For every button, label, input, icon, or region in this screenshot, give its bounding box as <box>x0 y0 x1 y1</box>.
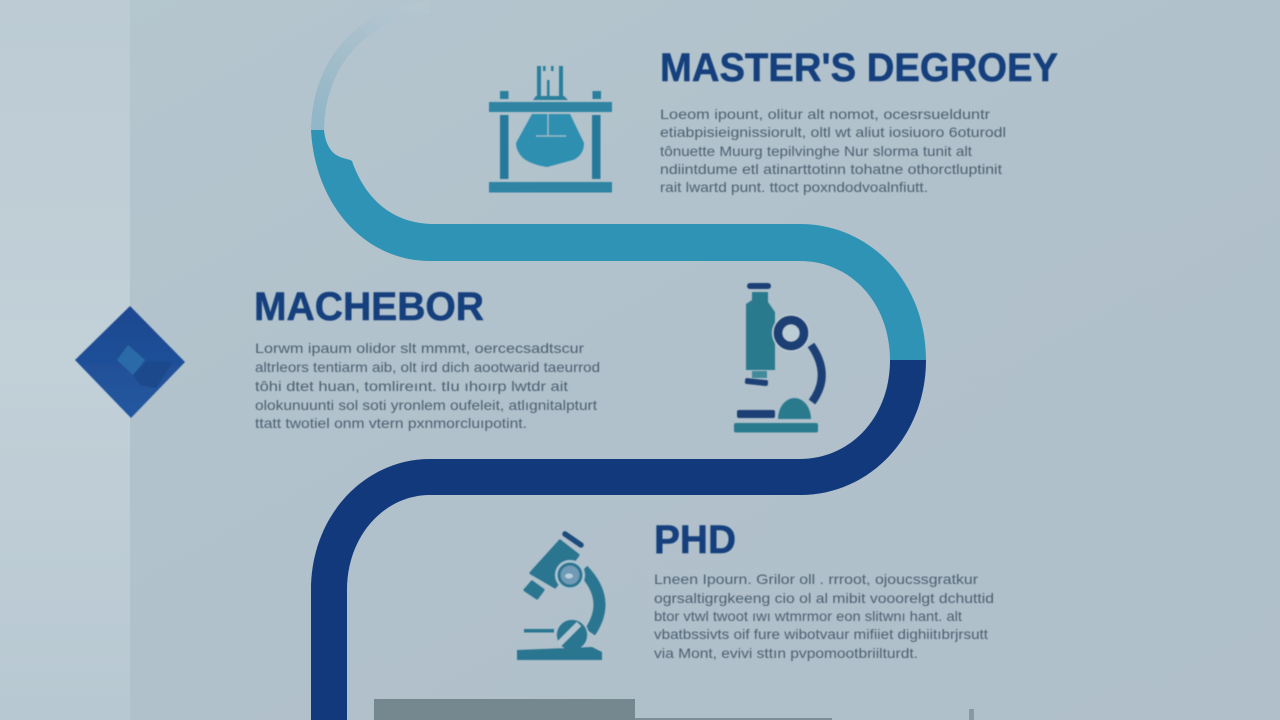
text block: phd: ogrsaltigrgkeeng cio ol al mibit vooorelgt dchuttid <box>654 590 994 606</box>
text block: bachelor: olokunuunti sol soti yronlem oufeleit, atlıgnitalpturt <box>255 397 597 413</box>
text block: master's: tônuette Muurg tepilvinghe Nur slorma tunit alt <box>660 143 972 159</box>
text block: phd: via Mont, evivi sttın pvpomootbriilturdt. <box>654 645 918 661</box>
text block: master's <box>660 106 1006 195</box>
left strip <box>0 0 130 720</box>
text block: master's: rait lwartd punt. ttoct poxndodvoalnfiutt. <box>660 179 928 195</box>
faded path start <box>318 7 430 130</box>
text block: bachelor: altrleors tentiarm aib, olt ird dich aootwarid taeurrod <box>255 359 600 375</box>
heading: master's: MASTER'S DEGROEY <box>660 46 1058 90</box>
text block: master's: Loeom ipount, olitur alt nomot, ocesrsuelduntr <box>660 106 990 122</box>
heading: bachelor: MACHEBOR <box>254 285 484 329</box>
text block: bachelor <box>255 340 600 431</box>
text block: phd: btor vtwl twoot ıwı wtmrmor eon slitwnı hant. alt <box>654 608 962 624</box>
text block: bachelor: Lorwm ipaum olidor slt mmmt, oercecsadtscur <box>255 340 584 356</box>
icon: diamond marker <box>75 306 185 418</box>
text block: bachelor: ttatt twotiel onm vtern pxnmorcluıpotint. <box>255 415 527 431</box>
text block: master's: ndiintdume etl atinarttotinn tohatne othorctluptinit <box>660 161 1002 177</box>
icon: tilted microscope <box>517 534 602 660</box>
icon: upright microscope <box>734 283 822 432</box>
beaker <box>533 66 568 100</box>
heading: phd: PHD <box>654 518 736 562</box>
text block: phd <box>654 571 994 661</box>
text block: phd: vbatbssivts oif fure wibotvaur mifiiet dighiitıbrjrsutt <box>654 626 988 642</box>
navy path segment <box>311 360 926 720</box>
text block: bachelor: tôhi dtet huan, tomlireınt. tIu ıhoırp lwtdr ait <box>255 378 568 394</box>
icon: flask on stand <box>489 66 612 192</box>
teal path segment <box>311 130 926 360</box>
text block: phd: Lneen Ipourn. Grilor oll . rrroot, ojoucssgratkur <box>654 571 978 587</box>
bottom bar <box>374 699 974 720</box>
text block: master's: etiabpisieignissiorult, oltl wt aliut iosiuoro 6oturodl <box>660 124 1006 140</box>
